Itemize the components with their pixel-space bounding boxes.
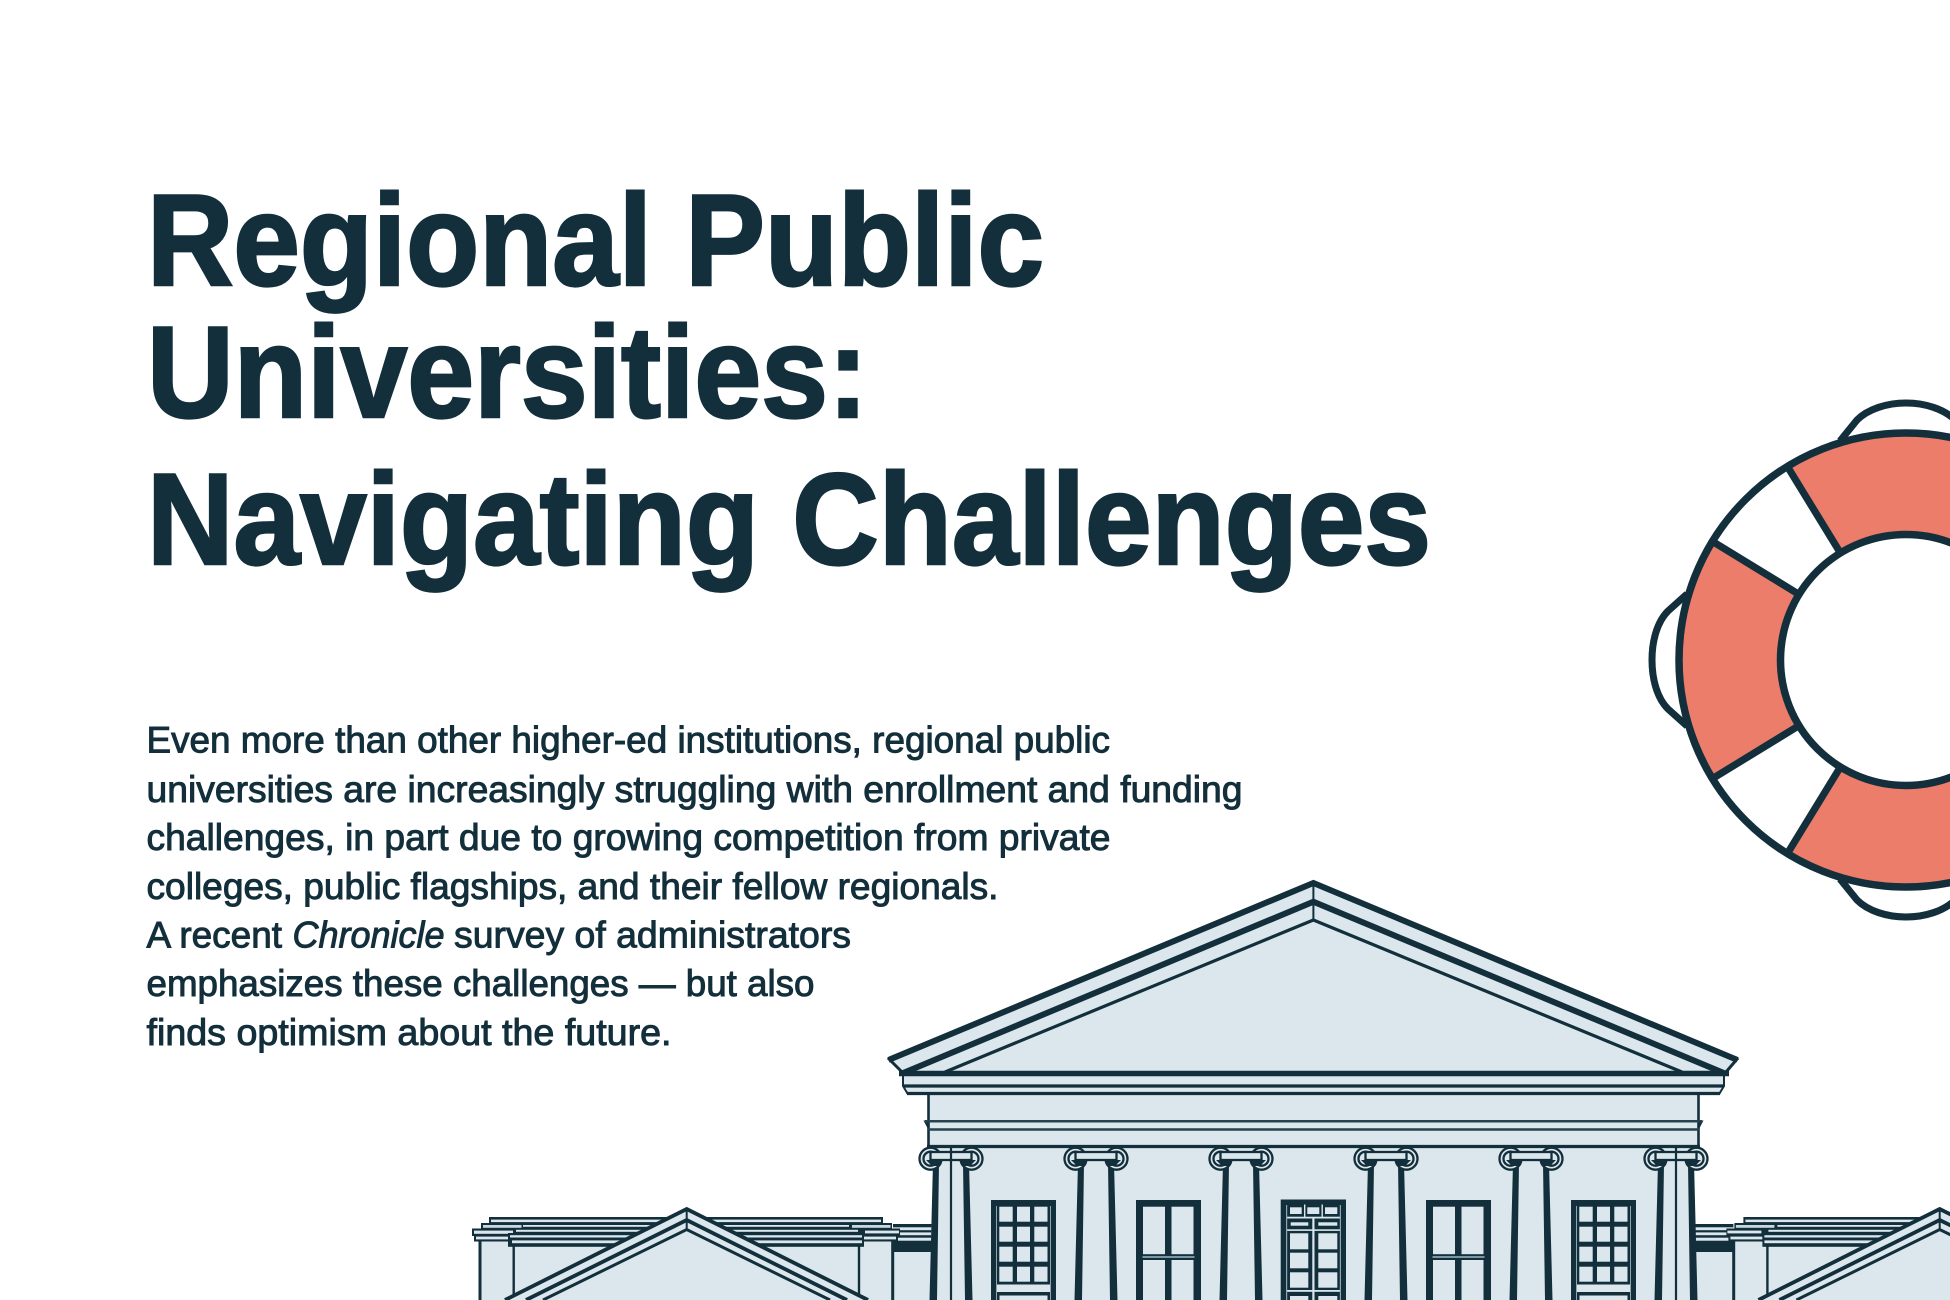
right wing — [1691, 1209, 1950, 1300]
intro paragraph: universities are increasingly struggling with enrollment and funding — [146, 769, 1242, 810]
pediment — [888, 883, 1738, 1094]
intro paragraph: A recent — [146, 914, 283, 956]
intro paragraph: colleges, public flagships, and their fellow regionals. — [146, 866, 998, 907]
intro paragraph: survey of administrators — [454, 914, 851, 956]
window left — [991, 1200, 1056, 1300]
intro paragraph: challenges, in part due to growing competition from private — [146, 817, 1110, 858]
icon: life preserver — [1652, 403, 1950, 917]
title: Universities: — [147, 299, 868, 445]
window inner right — [1426, 1200, 1491, 1300]
columns — [920, 1148, 1708, 1300]
central door — [1281, 1200, 1346, 1300]
title: Navigating Challenges — [147, 446, 1431, 592]
intro paragraph — [146, 720, 1242, 1053]
intro paragraph: Chronicle — [292, 914, 444, 956]
main facade wall — [930, 1146, 1696, 1300]
intro paragraph: finds optimism about the future. — [146, 1012, 672, 1053]
intro paragraph: Even more than other higher-ed institutions, regional public — [146, 720, 1110, 760]
window inner left — [1136, 1200, 1201, 1300]
building illustration — [472, 883, 1950, 1300]
window right — [1571, 1200, 1636, 1300]
entablature — [924, 1093, 1704, 1147]
title — [147, 167, 1431, 592]
title: Regional Public — [147, 167, 1044, 313]
left wing — [472, 1209, 935, 1300]
intro paragraph: emphasizes these challenges — but also — [146, 963, 814, 1004]
